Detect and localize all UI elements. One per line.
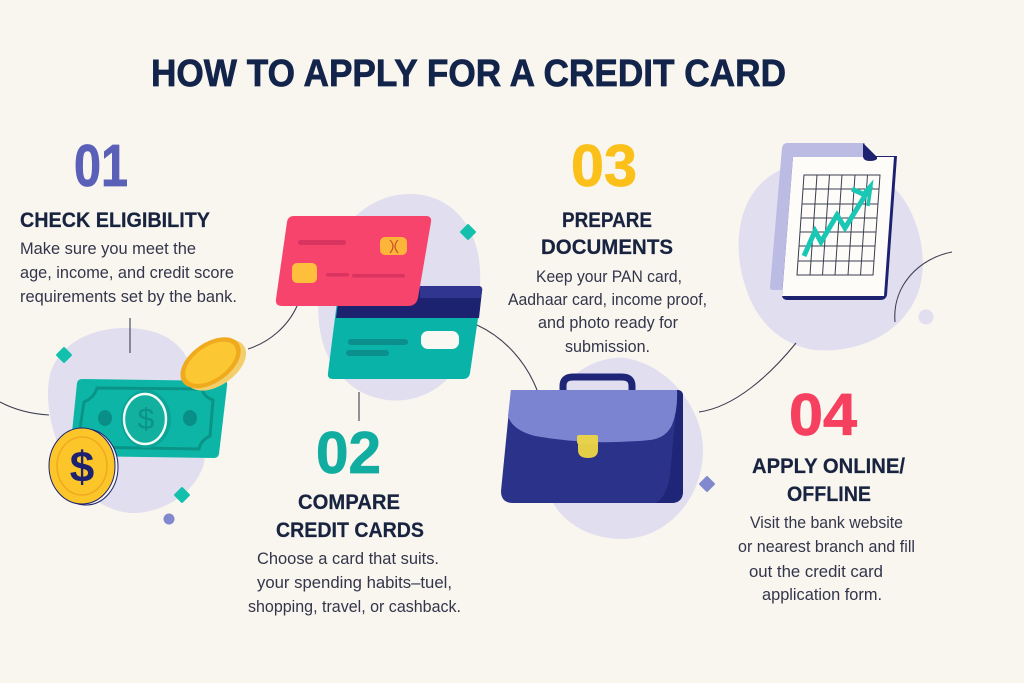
body: apply online/offline xyxy=(738,513,915,604)
heading: prepare documents: DOCUMENTS xyxy=(541,236,673,259)
decoration: purple diamond xyxy=(699,476,715,492)
body: compare credit cards: your spending habits–tuel, xyxy=(257,573,452,592)
icon: document page xyxy=(782,143,897,300)
step 4 text xyxy=(738,382,915,604)
illustration: credit cards xyxy=(276,194,482,401)
body: check eligibility: Make sure you meet the xyxy=(20,239,196,258)
title: HOW TO APPLY FOR A CREDIT CARD xyxy=(151,53,786,95)
chart grid xyxy=(797,175,880,275)
heading: prepare documents xyxy=(541,209,673,259)
icon: back sheet xyxy=(770,143,865,290)
body: check eligibility: age, income, and credit score xyxy=(20,263,234,282)
heading: check eligibility: CHECK ELIGIBILITY xyxy=(20,209,210,232)
illustration: money and coins xyxy=(48,325,255,513)
body: prepare documents: Keep your PAN card, xyxy=(536,267,682,286)
decoration: teal diamond xyxy=(56,347,72,363)
decoration: teal diamond xyxy=(174,487,190,503)
icon: briefcase handle xyxy=(563,377,632,392)
icon: dollar coin: $ xyxy=(70,443,94,492)
heading: compare credit cards: COMPARE xyxy=(298,491,400,514)
icon: banknote xyxy=(70,379,227,458)
body: apply online/offline: Visit the bank website xyxy=(750,513,903,532)
decoration: purple dot xyxy=(164,514,174,524)
heading: apply online/offline: OFFLINE xyxy=(787,483,871,506)
number 02: 02 xyxy=(316,420,381,486)
heading: compare credit cards: CREDIT CARDS xyxy=(276,519,424,542)
number 04: 04 xyxy=(789,382,857,448)
icon: tilted coin xyxy=(171,325,255,403)
body: prepare documents: Aadhaar card, income proof, xyxy=(508,290,707,309)
body: apply online/offline: or nearest branch and fill xyxy=(738,537,915,556)
chart: rising arrow line xyxy=(804,185,871,256)
body: apply online/offline: application form. xyxy=(762,585,882,604)
decoration: lavender dot xyxy=(918,310,934,324)
number 01: 01 xyxy=(74,133,128,199)
body: prepare documents xyxy=(508,267,707,356)
icon: briefcase body xyxy=(501,390,683,503)
number 03: 03 xyxy=(571,133,637,199)
body: compare credit cards: Choose a card that suits. xyxy=(257,549,439,568)
body: prepare documents: submission. xyxy=(565,337,650,356)
heading: apply online/offline: APPLY ONLINE/ xyxy=(752,455,905,478)
icon: red card xyxy=(276,216,431,306)
icon: banknote: $ xyxy=(138,403,155,436)
body: compare credit cards: shopping, travel, or cashback. xyxy=(248,597,461,616)
icon: teal card xyxy=(328,286,482,379)
illustration: document with chart xyxy=(739,143,923,350)
icon: dollar coin xyxy=(49,428,118,505)
icon: page corner fold xyxy=(863,143,877,161)
step 2 text xyxy=(248,420,461,616)
heading: prepare documents: PREPARE xyxy=(562,209,652,232)
heading: compare credit cards xyxy=(276,491,424,542)
icon: briefcase clasp xyxy=(577,435,598,458)
body: compare credit cards xyxy=(248,549,461,616)
body: prepare documents: and photo ready for xyxy=(538,313,678,332)
body: apply online/offline: out the credit card xyxy=(749,562,883,581)
body: check eligibility: requirements set by the bank. xyxy=(20,287,237,306)
illustration: briefcase xyxy=(501,358,703,539)
decoration: teal diamond xyxy=(460,224,476,240)
body: check eligibility xyxy=(20,239,237,306)
step 1 text xyxy=(20,133,237,306)
step 3 text xyxy=(508,133,707,356)
heading: apply online/offline xyxy=(752,455,905,506)
